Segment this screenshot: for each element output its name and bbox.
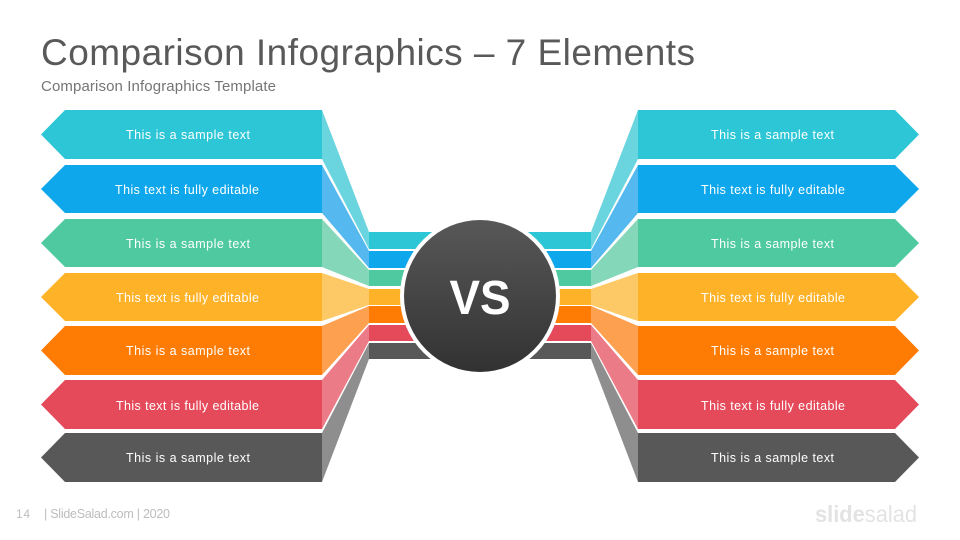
VS badge (400, 216, 560, 376)
left arrow 6 (41, 325, 439, 429)
right arrow 5 (521, 306, 919, 375)
left arrow 6: This text is fully editable (116, 399, 259, 413)
left arrow 5 (41, 306, 439, 375)
left arrow 7: This is a sample text (126, 451, 251, 465)
right arrow 7 (521, 343, 919, 482)
footer text: | SlideSalad.com | 2020 (44, 507, 170, 521)
left arrow 3: This is a sample text (126, 237, 251, 251)
left panel: seven labelled arrows (41, 110, 439, 482)
left arrow 3 (41, 219, 439, 286)
left arrow 1: This is a sample text (126, 128, 251, 142)
left arrow 1 (41, 110, 439, 249)
right arrow 1: This is a sample text (711, 128, 835, 142)
left arrow 4: This text is fully editable (116, 291, 259, 305)
right arrow 7: This is a sample text (711, 451, 835, 465)
right arrow 2 (521, 165, 919, 268)
subtitle: Comparison Infographics Template (41, 78, 276, 95)
left arrow 4 (41, 273, 439, 321)
right arrow 4 (521, 273, 919, 321)
left arrow 2: This text is fully editable (115, 183, 259, 197)
right arrow 3: This is a sample text (711, 237, 835, 251)
right arrow 2: This text is fully editable (701, 183, 845, 197)
VS badge: VS (450, 272, 510, 325)
right panel: seven labelled arrows (521, 110, 919, 482)
title: Comparison Infographics – 7 Elements (41, 32, 695, 73)
right arrow 6 (521, 325, 919, 429)
right arrow 6: This text is fully editable (701, 399, 845, 413)
right arrow 1 (521, 110, 919, 249)
left arrow 2 (41, 165, 439, 268)
page number: 14 (16, 507, 30, 521)
right arrow 3 (521, 219, 919, 286)
right arrow 5: This is a sample text (711, 344, 835, 358)
left arrow 5: This is a sample text (126, 344, 251, 358)
right arrow 4: This text is fully editable (701, 291, 845, 305)
logo: slidesalad (815, 501, 917, 527)
left arrow 7 (41, 343, 439, 482)
